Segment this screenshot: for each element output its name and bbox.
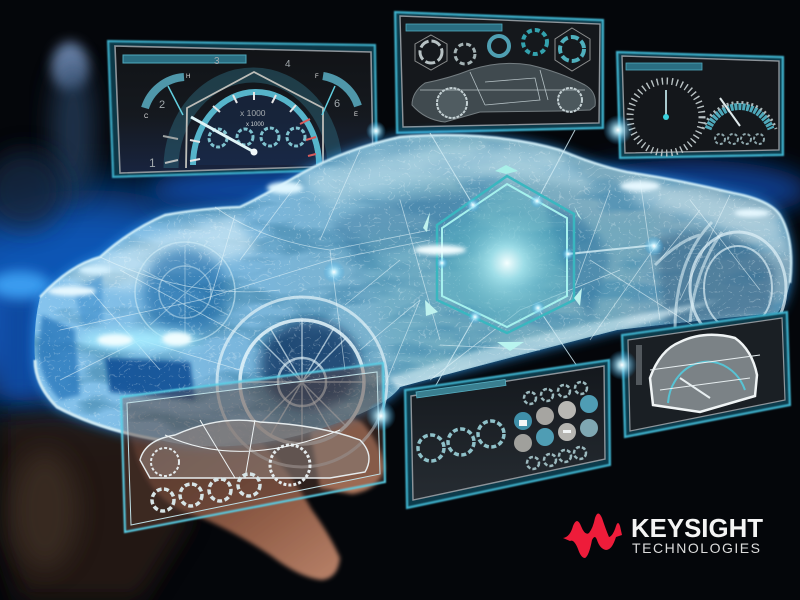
rocker highlight	[390, 300, 720, 392]
glowing nodes and flares	[323, 115, 664, 431]
fine wire scratches	[30, 130, 800, 460]
hexagon dial icons	[415, 28, 590, 71]
small dial rows	[524, 382, 587, 469]
panel: front-view car gauge	[622, 312, 790, 437]
second finger	[310, 412, 384, 494]
panel: bottom-centre icons	[405, 360, 610, 508]
palm in shadow	[0, 410, 190, 600]
rear highlight	[620, 180, 790, 260]
gauge numbers: 1	[149, 156, 156, 170]
icon: red waveform	[563, 514, 622, 558]
gauge: outer arc band	[171, 75, 335, 168]
hand pointing at the car	[0, 410, 384, 600]
gauge numbers: F	[315, 74, 319, 80]
windows	[330, 193, 470, 260]
gauge numbers: x 1000	[240, 108, 266, 118]
rear wheel well dark	[655, 232, 775, 325]
small car wireframe	[140, 420, 369, 485]
rim light along roof line	[40, 135, 791, 297]
connector lines	[430, 130, 655, 392]
gauge numbers: 4	[285, 59, 291, 70]
gauge numbers: x 1000	[246, 122, 265, 128]
panel: speedometers	[617, 52, 783, 158]
rear wheel	[655, 222, 786, 344]
car wireframe	[412, 63, 595, 122]
front grille	[105, 358, 195, 400]
car: holographic glass body	[30, 130, 800, 467]
gauge numbers: 3	[214, 56, 220, 67]
right speedometer	[703, 98, 776, 129]
needle	[191, 117, 258, 156]
outer blue glow	[35, 135, 791, 446]
far wheel	[143, 248, 227, 336]
wireframe lines	[60, 150, 760, 385]
far wheel spokes	[135, 242, 235, 342]
gauge numbers: 2	[159, 99, 165, 111]
body fill	[30, 130, 800, 460]
progress bar	[123, 55, 246, 63]
front wheel well dark	[260, 320, 360, 410]
left speedometer	[630, 81, 702, 153]
dial icons row	[152, 474, 260, 511]
gauge numbers: 6	[334, 98, 340, 110]
pointing finger	[130, 430, 340, 580]
gauge numbers: E	[354, 112, 358, 118]
hexagon dial trio	[418, 421, 504, 461]
dark mottling	[34, 141, 790, 431]
gauge: rev dial	[163, 72, 323, 168]
front wheel	[217, 297, 387, 467]
roof highlight	[300, 145, 600, 205]
small hexagon icons	[209, 128, 305, 147]
panel: bottom-left dashboard overlay	[121, 363, 385, 532]
gauge numbers: H	[186, 74, 190, 80]
panel: rev gauge dashboard	[108, 41, 377, 177]
hood highlight	[60, 215, 260, 290]
round icons grid	[514, 395, 598, 452]
headlight lights	[48, 181, 770, 349]
gauge numbers: C	[144, 114, 149, 120]
tagline: TECHNOLOGIES	[632, 540, 760, 556]
logo: Keysight Technologies	[563, 513, 763, 558]
panel: car wireframe and icons	[395, 12, 603, 133]
central hexagon hologram	[414, 165, 582, 351]
wordmark: KEYSIGHT	[631, 513, 763, 543]
gauge numbers	[144, 56, 358, 170]
side gauge left	[145, 77, 184, 108]
side gauge right	[323, 76, 358, 106]
chevrons and corner wedges	[495, 165, 518, 174]
